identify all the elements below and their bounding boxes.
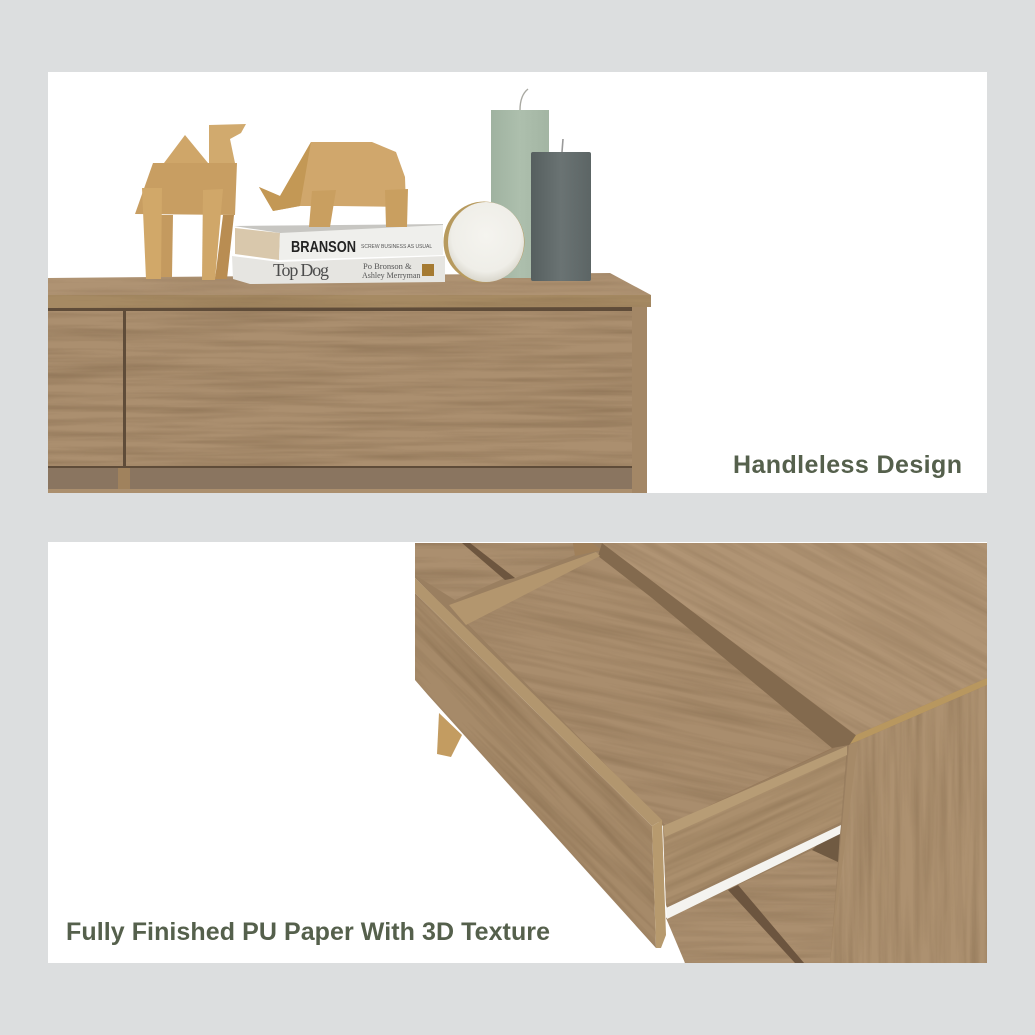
cabinet side panel (830, 675, 990, 975)
decor: wooden rhino (259, 142, 408, 227)
drawer rim back (449, 552, 600, 625)
decor: wooden camel (135, 124, 246, 280)
cabinet top board (48, 272, 652, 308)
cabinet carcass (48, 306, 647, 493)
decor: white ceramic ball (444, 202, 524, 282)
decor: stacked books (232, 224, 445, 284)
decor: pillar candles (491, 89, 591, 281)
cabinet top surface (602, 543, 987, 735)
panel: fully finished PU paper (48, 542, 987, 963)
back drawers and lower drawers (415, 542, 845, 964)
white drawer slide (666, 825, 841, 919)
decor: stacked books: SCREW BUSINESS AS USUAL (361, 244, 432, 250)
front leg (437, 713, 462, 757)
decor: stacked books: Top Dog (273, 260, 329, 280)
decor: stacked books: Po Bronson & (363, 261, 412, 271)
drawer side wall (663, 746, 847, 904)
cabinet top edge (850, 678, 987, 744)
drawer interior (468, 543, 856, 825)
centre drawer front (126, 311, 632, 466)
drawer edge (652, 820, 666, 948)
underlay behind drawer (415, 543, 987, 963)
decor: stacked books: BRANSON (291, 239, 356, 256)
drawer floor (468, 552, 832, 825)
heading: fully finished PU paper: Fully Finished PU Paper With 3D Texture (66, 918, 550, 946)
drawer rim (415, 578, 662, 826)
dark grooves and stile (462, 543, 840, 963)
shadow band under top (598, 543, 858, 748)
heading: handleless design: Handleless Design (733, 451, 962, 479)
decor: stacked books: Ashley Merryman (362, 271, 420, 280)
drawer front face (415, 578, 666, 948)
panel: handleless design (48, 72, 987, 493)
left drawer front (48, 311, 123, 466)
